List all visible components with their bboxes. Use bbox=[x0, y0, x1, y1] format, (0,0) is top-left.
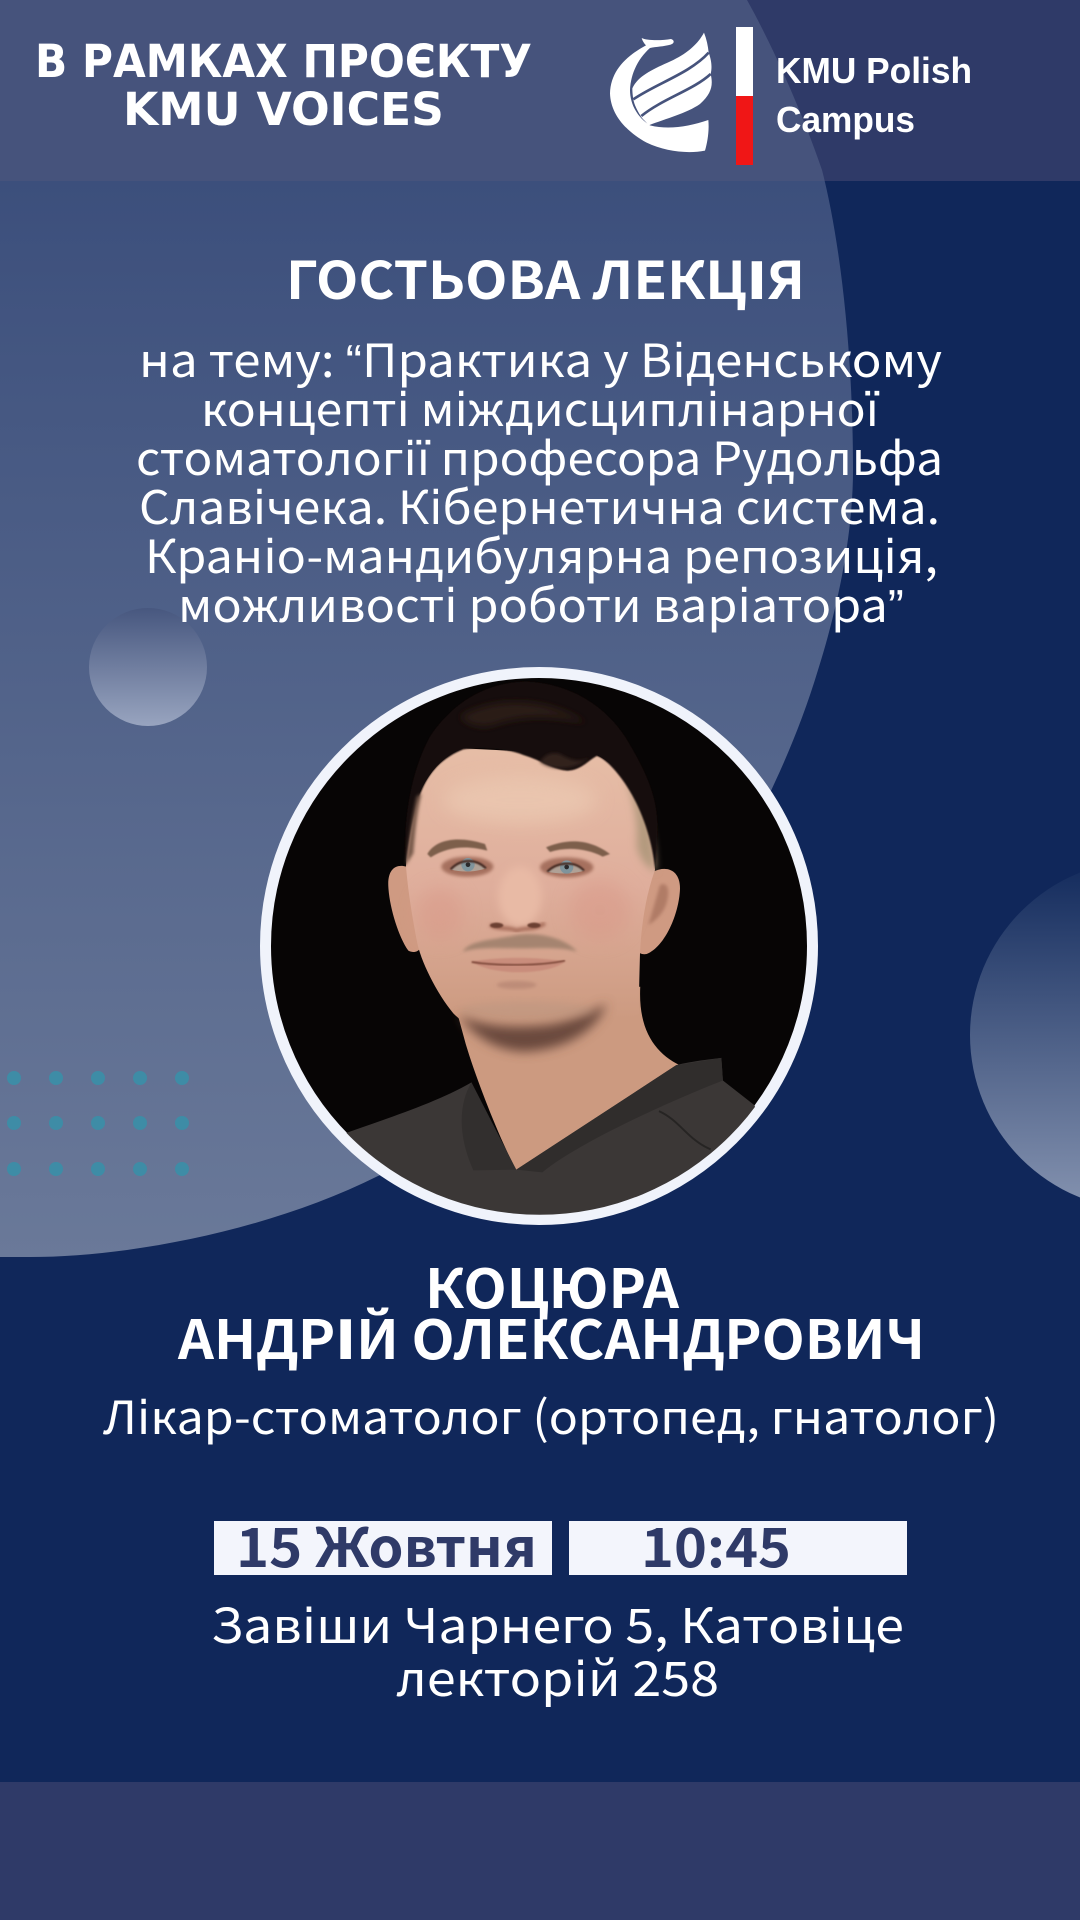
lecture topic text: концепті міждисциплінарної bbox=[201, 374, 880, 440]
eye sockets bbox=[441, 857, 593, 877]
icon: Polish flag bar bbox=[736, 27, 753, 165]
mouth bbox=[472, 958, 565, 972]
heading: guest lecture: ГОСТЬОВА ЛЕКЦІЯ bbox=[286, 239, 805, 314]
header band bbox=[0, 0, 1080, 181]
time box: 10:45 bbox=[641, 1504, 791, 1583]
mustache bbox=[463, 934, 577, 952]
time box bbox=[569, 1504, 907, 1583]
neck and shirt bbox=[346, 986, 755, 1215]
lecture topic text: можливості роботи варіатора ” bbox=[178, 570, 904, 636]
faded side hair bbox=[625, 777, 655, 872]
lecture topic text: на тему: “Практика у Віденському bbox=[139, 325, 942, 391]
face bbox=[406, 748, 655, 1043]
address: лекторій 258 bbox=[396, 1640, 719, 1710]
lecture topic text bbox=[136, 325, 943, 636]
header project title bbox=[35, 35, 532, 136]
header project title: KMU VOICES bbox=[123, 83, 444, 136]
hair bbox=[405, 682, 657, 870]
speaker portrait bbox=[266, 672, 812, 1224]
speaker profession: Лікар-стоматолог (ортопед, гнатолог) bbox=[103, 1382, 999, 1448]
nose bbox=[498, 867, 542, 927]
chin shadow bbox=[497, 981, 537, 989]
logo text KMU Polish Campus: KMU Polish bbox=[776, 50, 972, 91]
speaker name bbox=[177, 1245, 925, 1375]
head bbox=[388, 682, 680, 1052]
address bbox=[211, 1587, 904, 1710]
lecture topic text: Славічека. Кібернетична система. bbox=[139, 472, 940, 538]
dot grid bbox=[7, 1071, 189, 1176]
lecture topic text: стоматології професора Рудольфа bbox=[136, 423, 943, 489]
eyebrows bbox=[427, 839, 610, 857]
large light circle shape bbox=[0, 0, 853, 1257]
logo text KMU Polish Campus: Campus bbox=[776, 99, 915, 140]
logo text KMU Polish Campus bbox=[776, 50, 972, 140]
lecture topic text: Краніо-мандибулярна репозиція, bbox=[145, 521, 938, 587]
cheek tint bbox=[417, 880, 630, 940]
icon: KMU swan logo bbox=[610, 33, 712, 152]
header project title: В РАМКАХ ПРОЄКТУ bbox=[35, 35, 532, 88]
forehead highlight bbox=[443, 777, 597, 823]
speaker name: АНДРІЙ ОЛЕКСАНДРОВИЧ bbox=[177, 1296, 925, 1375]
eyes bbox=[451, 858, 584, 874]
speaker name: КОЦЮРА bbox=[425, 1245, 679, 1324]
footer band bbox=[0, 1782, 1080, 1920]
decorative right circle bbox=[970, 860, 1080, 1210]
date box: 15 Жовтня bbox=[236, 1504, 537, 1583]
ears bbox=[388, 866, 420, 952]
decorative small circle bbox=[89, 608, 207, 726]
address: Завіши Чарнего 5, Катовіце bbox=[211, 1587, 904, 1657]
stubble bbox=[458, 1003, 607, 1052]
